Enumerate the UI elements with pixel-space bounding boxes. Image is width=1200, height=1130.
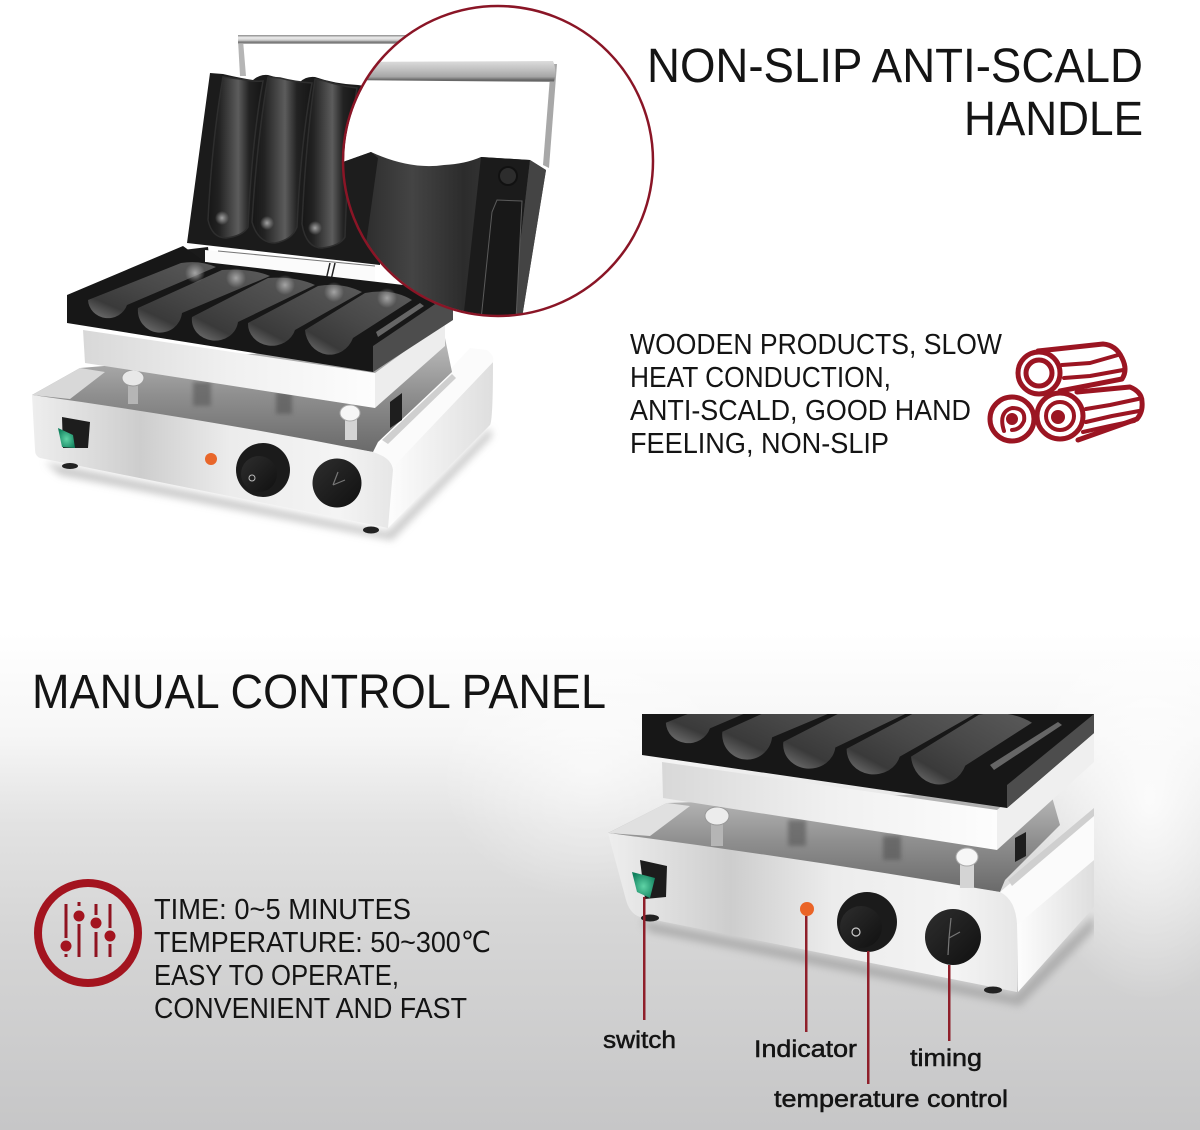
label: temperature control: temperature control bbox=[774, 1086, 1008, 1113]
text block: wooden handle description bbox=[630, 329, 1003, 460]
icon: wooden logs bbox=[990, 344, 1142, 441]
text block: control specifications: CONVENIENT AND FAST bbox=[154, 993, 467, 1025]
upper baking plate bbox=[187, 73, 380, 265]
close-up indicator light bbox=[800, 902, 814, 916]
text block: control specifications bbox=[154, 894, 491, 1025]
product photo: control panel close-up bbox=[608, 680, 1094, 1006]
label: switch: switch bbox=[603, 1027, 676, 1054]
product photo: open waffle machine bbox=[32, 35, 493, 540]
heading: non-slip handle: HANDLE bbox=[964, 93, 1143, 146]
label: indicator: Indicator bbox=[754, 1036, 857, 1063]
text block: wooden handle description: WOODEN PRODUCTS, SLOW bbox=[630, 329, 1003, 361]
close-up white block bbox=[662, 732, 1094, 850]
metal base bbox=[32, 338, 493, 534]
text block: control specifications: TEMPERATURE: 50~300℃ bbox=[154, 927, 491, 959]
zoom circle outline bbox=[343, 6, 653, 316]
rear chrome handle bar bbox=[238, 35, 408, 76]
text block: wooden handle description: HEAT CONDUCTION, bbox=[630, 362, 891, 394]
close-up baking plate bbox=[642, 714, 1094, 808]
close-up temperature knob bbox=[837, 892, 897, 952]
close-up chrome bar bbox=[367, 61, 557, 168]
close-up power switch bbox=[632, 860, 667, 899]
text block: wooden handle description: ANTI-SCALD, GOOD HAND bbox=[630, 395, 971, 427]
callout line: switch bbox=[643, 897, 646, 1020]
close-up support posts bbox=[705, 807, 1026, 888]
text block: control specifications: EASY TO OPERATE, bbox=[154, 960, 399, 992]
background highlight right of control panel machine bbox=[1030, 600, 1200, 1000]
support posts bbox=[122, 370, 402, 440]
label: timing: timing bbox=[910, 1045, 982, 1072]
background highlight left of control panel machine bbox=[440, 640, 740, 900]
callout line: temperature control bbox=[867, 951, 870, 1084]
text block: wooden handle description: FEELING, NON-SLIP bbox=[630, 428, 889, 460]
close-up timer knob bbox=[925, 909, 981, 965]
timer knob bbox=[312, 458, 362, 508]
close-up metal base bbox=[608, 790, 1094, 994]
power switch bbox=[58, 417, 90, 448]
heading: non-slip handle bbox=[647, 40, 1143, 146]
hinge and wires bbox=[183, 247, 375, 282]
zoom circle: handle close-up bbox=[344, 36, 557, 315]
heading: manual control panel: MANUAL CONTROL PANEL bbox=[32, 666, 606, 719]
close-up handle body bbox=[344, 152, 546, 315]
icon: sliders in circle bbox=[38, 883, 138, 983]
heading: non-slip handle: NON-SLIP ANTI-SCALD bbox=[647, 40, 1143, 93]
lower baking plate bbox=[67, 246, 453, 372]
callout line: indicator bbox=[805, 916, 808, 1032]
temperature knob bbox=[236, 443, 290, 497]
text block: control specifications: TIME: 0~5 MINUTES bbox=[154, 894, 411, 926]
callout line: timing bbox=[948, 965, 950, 1041]
white heating block bbox=[83, 322, 445, 408]
indicator light bbox=[205, 453, 217, 465]
base shadow bbox=[45, 428, 492, 540]
close-up base shadow bbox=[640, 915, 1094, 1006]
